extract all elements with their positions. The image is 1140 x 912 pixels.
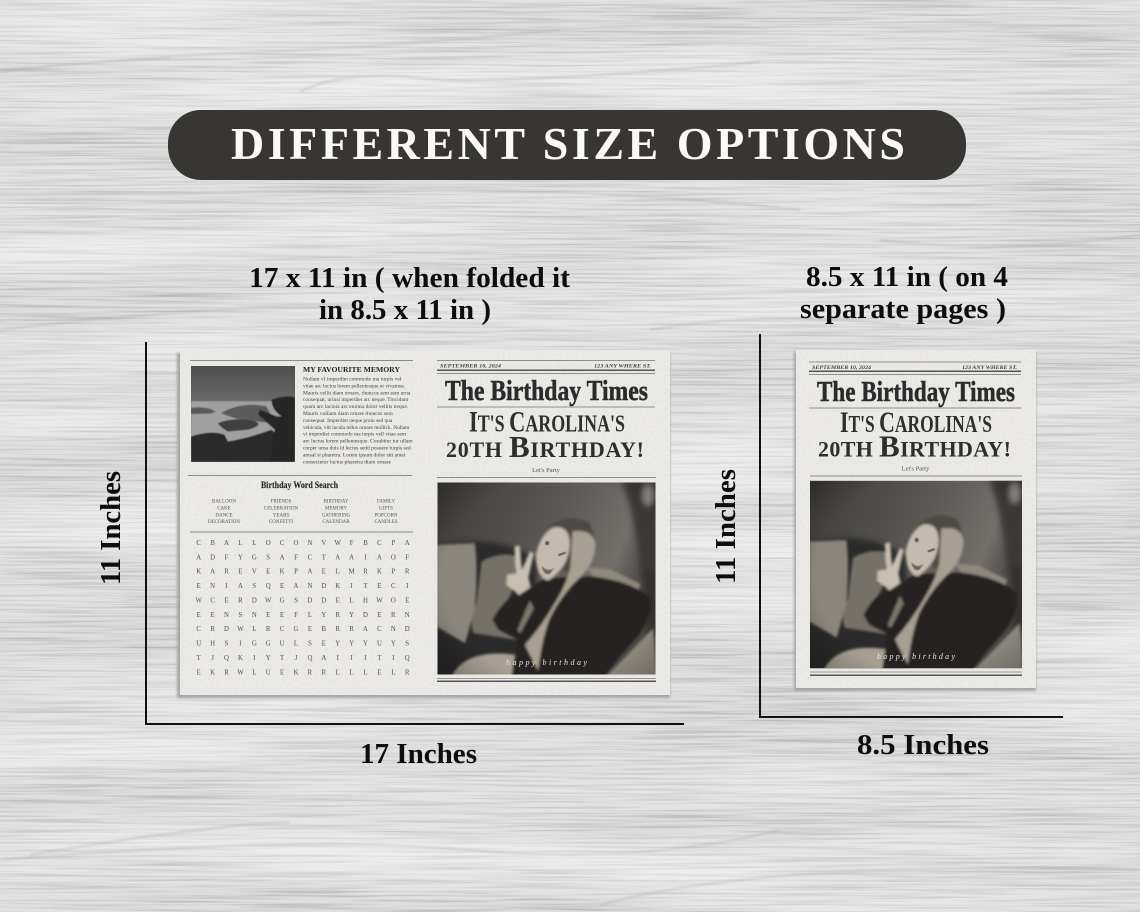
- label: 11 inches right: 11 Inches: [711, 469, 742, 584]
- address: 123 ANY WHERE ST.: [962, 366, 1017, 371]
- mid rule: [188, 475, 412, 476]
- word search grid: ENIASQEANDKITECI: [197, 583, 409, 590]
- memory body text: vehicula, vitt lacula tellus ornare mollick. Nullam: [303, 425, 409, 431]
- label: 8.5 inches: 8.5 Inches: [857, 730, 989, 761]
- dimension lines: spread: [146, 342, 684, 724]
- memory body text: Nullam vI imperdiet commodo ma turpis vel: [303, 376, 402, 382]
- headline line 2: 20TH BIRTHDAY!: [818, 429, 1011, 464]
- word list: FRIENDS: [271, 500, 292, 504]
- memory body text: consectetur luctus pharetra diam ornare: [303, 459, 392, 465]
- memory body text: [303, 376, 413, 465]
- word list: CAKE: [217, 506, 231, 512]
- headline line 1: IT'S CAROLINA'S: [469, 406, 625, 438]
- newspaper title: The Birthday Times: [817, 376, 1015, 408]
- word list: DECORATION: [208, 520, 240, 525]
- word list: CANDLES: [374, 520, 398, 525]
- headline line 1: IT'S CAROLINA'S: [840, 406, 992, 439]
- memory body text: consequat. Imperdiet neque proin sed qua: [303, 418, 393, 424]
- memory body text: Mauris vulliam diam ornare rhoncus sem: [303, 411, 393, 417]
- date: SEPTEMBER 10, 2024: [812, 366, 872, 371]
- word search grid: ADFYGSAFCTAAIAOF: [196, 554, 409, 561]
- word list: BIRTHDAY: [323, 500, 349, 504]
- word search grid: CBALLOCONVWFBCPA: [196, 540, 410, 547]
- word list: YEARS: [273, 513, 289, 518]
- word search grid: CRDWLRCGEBRRACND: [196, 626, 410, 633]
- word search grid: [195, 540, 410, 676]
- word list: POPCORN: [374, 513, 398, 518]
- memory heading: MY FAVOURITE MEMORY: [303, 365, 401, 374]
- memory body text: consequat, uriusi imperdiet arc neque. Tincidunt: [303, 397, 409, 403]
- top rule: [190, 360, 413, 361]
- word list: [208, 500, 398, 525]
- word search grid: KAREVEKPAELMRKPR: [196, 569, 410, 576]
- memory body text: amsal si pharetra. Lorem ipsum dolor sitt amet: [303, 452, 406, 458]
- main portrait photo: [803, 478, 1026, 673]
- main portrait photo: [430, 480, 660, 680]
- panel: 17 x 11 spread: [177, 350, 670, 698]
- date: SEPTEMBER 10, 2024: [440, 364, 502, 369]
- dimension lines: single page: [760, 334, 1063, 717]
- photo caption: happy birthday: [506, 658, 587, 667]
- word search heading: Birthday Word Search: [261, 480, 338, 490]
- memory body text: vi imperdiet commodo ma turpis vell vitae sem: [303, 432, 406, 438]
- memory photo: [191, 366, 295, 462]
- heading: 17 x 11 option: [249, 263, 571, 326]
- memory body text: corper urna duis id lectus sedd posuere turpis sed: [303, 446, 411, 452]
- tagline: Let's Party: [532, 467, 561, 474]
- memory body text: Mauris vellit diam ornare, rhoncus sem sem urna: [303, 390, 411, 396]
- memory body text: vitae arc luctus lorem pellentesque et vivamus.: [303, 383, 405, 389]
- word list: CALENDAR: [322, 520, 350, 525]
- masthead dark rule: [809, 370, 1021, 372]
- word list: FAMILY: [377, 500, 396, 504]
- bottom rules: [437, 678, 656, 680]
- memory body text: quam arc lacinia arc enimia dolor vellits neque.: [303, 404, 408, 410]
- heading: 8.5 x 11 option: [800, 262, 1008, 325]
- label: 17 inches: 17 Inches: [360, 739, 477, 770]
- panel: 8.5 x 11 page: [794, 350, 1036, 691]
- memory body text: arc luctus lorem pellentesque. Curabitur tur ullam: [303, 439, 413, 445]
- word search grid: EKRWLUEKRRLLLELR: [197, 669, 410, 676]
- masthead dark rule: [437, 370, 655, 371]
- photo caption: happy birthday: [877, 652, 955, 661]
- headline line 2: 20TH BIRTHDAY!: [446, 429, 644, 464]
- word search grid: TJQKIYTJQAIIITIQ: [197, 655, 410, 662]
- title banner: [168, 110, 966, 180]
- heading: 17 x 11 option: in 8.5 x 11 in ): [319, 295, 491, 326]
- tagline: Let's Party: [902, 466, 930, 472]
- word search grid: EENSNEEFLYRYDERN: [197, 612, 410, 619]
- word search grid: UHSIGGULSEYYYUYS: [196, 641, 409, 648]
- label: 11 inches left: 11 Inches: [96, 471, 127, 585]
- grid rule: [190, 532, 413, 533]
- bottom dark rule: [810, 674, 1022, 676]
- word list: MEMORY: [325, 506, 347, 512]
- bottom rules: [810, 671, 1022, 673]
- word list: GATHERING: [322, 513, 351, 518]
- word list: CONFETTI: [269, 520, 293, 525]
- word list: DANCE: [215, 513, 233, 518]
- heading: 17 x 11 option: 17 x 11 in ( when folded it: [249, 263, 571, 294]
- title banner: DIFFERENT SIZE OPTIONS: [231, 118, 905, 169]
- heading: 8.5 x 11 option: separate pages ): [800, 294, 1006, 325]
- word search grid: WCERDWGSDDELHWOE: [195, 598, 409, 604]
- newspaper title: The Birthday Times: [445, 375, 648, 407]
- word list: CELEBRATION: [264, 506, 298, 512]
- masthead rules: [437, 360, 656, 478]
- address: 123 ANY WHERE ST.: [594, 364, 651, 369]
- word list: GIFTS: [379, 506, 393, 512]
- bottom dark rule: [437, 680, 656, 682]
- masthead rules: [809, 362, 1022, 476]
- word list: BALLOON: [212, 500, 236, 504]
- heading: 8.5 x 11 option: 8.5 x 11 in ( on 4: [806, 262, 1008, 293]
